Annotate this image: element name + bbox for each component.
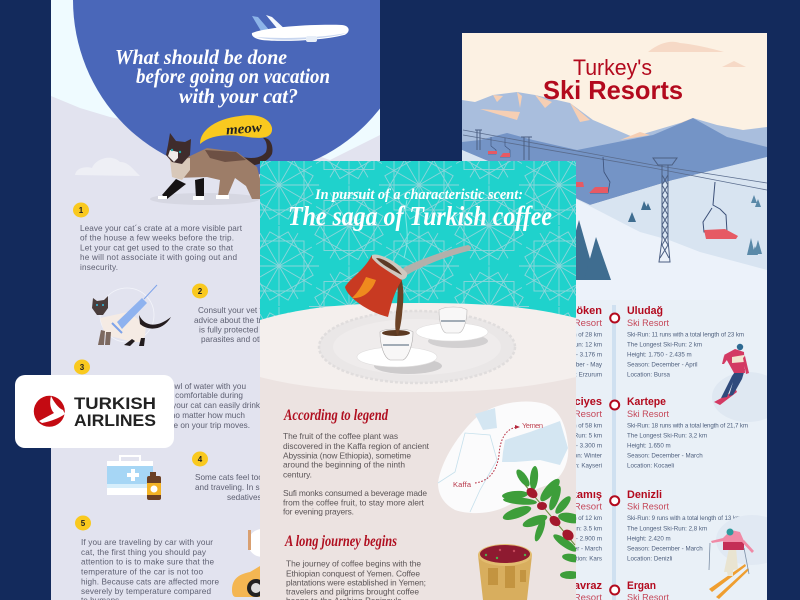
resort: Ergan: Ergan xyxy=(627,580,656,592)
step 5: severely by temperature compared xyxy=(81,587,211,596)
step 1: of the house a few weeks before the trip. xyxy=(80,234,234,242)
front mountains xyxy=(462,118,767,205)
step 2: advice about the trip xyxy=(194,316,268,325)
resort: Davraz: Davraz xyxy=(566,580,602,592)
panel: cat travel infographic xyxy=(51,0,380,600)
resort: Erciyes: Season: Winter xyxy=(560,453,602,460)
chairlift cabins xyxy=(488,137,738,239)
step 1: Let your cat get used to the crate so that xyxy=(80,244,234,252)
section: A long journey begins: travelers and pilgrims brought coffee xyxy=(286,587,419,597)
resort: Erciyes: The Longest Ski-Run: 5 km xyxy=(527,433,602,440)
title xyxy=(544,59,682,100)
resort: Erciyes: Height: 2.200 - 3.300 m xyxy=(537,443,602,450)
step 5 xyxy=(75,516,219,600)
illustration: snowboarder xyxy=(712,344,784,422)
section: According to legend xyxy=(283,407,430,517)
badge 5 xyxy=(75,516,91,530)
panel: ski resorts infographic xyxy=(462,33,788,600)
resort: Uludağ: Height: 1.750 - 2.435 m xyxy=(627,352,692,359)
step 5: high. Because cats are affected more xyxy=(81,577,219,586)
icon: copper cezve xyxy=(345,245,471,317)
section: According to legend: The fruit of the coffee plant was xyxy=(283,431,398,441)
section: According to legend: According to legend xyxy=(283,407,389,424)
step 5: attention to is to make sure that the xyxy=(81,558,214,567)
section: A long journey begins: The journey of coffee begins with the xyxy=(286,559,421,569)
doily xyxy=(319,311,515,383)
step 3: the trip, and your cat can easily drink xyxy=(127,401,261,410)
resort: Erciyes: Location: Kayseri xyxy=(555,463,602,470)
section: A long journey begins xyxy=(284,533,426,600)
icon: front coffee cup and saucer xyxy=(357,329,442,374)
logo card: Turkish Airlines xyxy=(15,375,174,448)
resort: Palandöken xyxy=(576,306,602,376)
resort: Kartepe: Ski-Run: 18 runs with a total length of 21,7 km xyxy=(627,423,748,430)
resort: Erciyes: Erciyes xyxy=(563,396,602,408)
step 4: Some cats feel too xyxy=(195,473,263,482)
resort: Kartepe: Location: Kocaeli xyxy=(627,463,674,470)
step 3 xyxy=(74,360,261,430)
clouds xyxy=(648,42,746,67)
resort: Palandöken: Palandöken xyxy=(540,305,602,317)
badge 2: 2 xyxy=(198,287,203,296)
resort: Uludağ: Ski-Run: 11 runs with a total length of 23 km xyxy=(627,332,744,338)
resort: Uludağ: Season: December - April xyxy=(627,362,698,369)
step 2: parasites and other xyxy=(201,335,271,344)
illustration: coffee branch xyxy=(501,466,583,579)
resort: Sarıkamış: Height: 2.100 - 2.900 m xyxy=(537,535,602,542)
resort: Erciyes xyxy=(576,397,602,469)
title: Ski Resorts xyxy=(543,75,683,105)
lift pylons xyxy=(475,130,677,262)
resort: Sarıkamış: Location: Kars xyxy=(562,555,602,562)
step 1 xyxy=(73,202,243,272)
resort: Ergan xyxy=(627,580,669,600)
snow slopes xyxy=(462,150,767,270)
resort: Kartepe: Season: December - March xyxy=(627,453,703,460)
panel: Turkish coffee infographic xyxy=(260,161,583,600)
step 3: the vehicle on your trip moves. xyxy=(139,421,250,430)
resort: Sarıkamış: Ski Resort xyxy=(558,502,602,513)
speech bubble: meow: meow xyxy=(225,120,263,139)
step 2: Consult your vet for xyxy=(198,306,269,315)
logo card: Turkish Airlines: AIRLINES xyxy=(74,411,156,430)
ski lift cables xyxy=(463,130,767,190)
icon: Turkish Airlines bird xyxy=(34,396,65,427)
badge 1: 1 xyxy=(79,206,84,215)
illustration: basket of coffee cherries xyxy=(478,544,532,600)
section: A long journey begins: Ethiopian conquest of Yemen. Coffee xyxy=(286,568,420,578)
title: Turkey's xyxy=(573,55,652,80)
step 3: Bring a bowl of water with you xyxy=(137,382,246,391)
resort: Kartepe xyxy=(627,396,748,470)
resort: Denizli: Denizli xyxy=(627,489,662,501)
resort: Denizli: Season: December - March xyxy=(627,545,703,552)
steam xyxy=(404,200,407,258)
coffee pour stream xyxy=(395,278,403,335)
section: According to legend: Sufi monks consumed a beverage made xyxy=(283,488,427,498)
resort: Palandöken: Ski-Run: 22 runs with a total length of 28 km xyxy=(481,332,602,338)
icon: airplane xyxy=(252,15,349,42)
resort: Kartepe: Kartepe xyxy=(627,396,666,408)
step 4 xyxy=(192,452,260,500)
table xyxy=(260,303,576,600)
resort: Denizli: Location: Denizli xyxy=(627,555,672,562)
illustration: siamese cat with syringe xyxy=(92,285,171,346)
trees xyxy=(562,195,762,280)
step 2 xyxy=(192,284,260,344)
step 3: so your cat is comfortable during xyxy=(125,391,243,400)
back mountains xyxy=(462,92,767,180)
resort: Uludağ: The Longest Ski-Run: 2 km xyxy=(627,342,702,348)
heading: In pursuit of a characteristic scent: xyxy=(314,187,523,203)
resort: Palandöken: Ski Resort xyxy=(558,318,602,329)
step 1: insecurity. xyxy=(80,263,118,272)
illustration: first aid kit xyxy=(107,456,161,500)
step 1: Leave your cat´s crate at a more visible part xyxy=(80,224,243,233)
illustration: skier xyxy=(709,515,788,599)
heading xyxy=(288,187,552,231)
resort: Uludağ: Ski Resort xyxy=(627,318,669,329)
step 4: sedatives xyxy=(227,493,262,502)
step 1: he will not associate it with going out and xyxy=(80,253,237,262)
resort: Palandöken: Height: 2.200 - 3.176 m xyxy=(537,352,602,359)
resort: Kartepe: Height: 1.650 m xyxy=(627,443,671,450)
section: According to legend: discovered in the Kaffa region of ancient xyxy=(283,441,430,451)
title xyxy=(115,45,330,108)
resort: Sarıkamış: Sarıkamış xyxy=(550,489,602,501)
resort: Kartepe: Ski Resort xyxy=(627,409,669,420)
step 5: temperature of the car is not too xyxy=(81,568,203,577)
section: According to legend: century. xyxy=(283,469,312,479)
section: According to legend: for evening prayers. xyxy=(283,507,354,517)
resort: Sarıkamış: The Longest Ski-Run: 3.5 km xyxy=(522,525,602,532)
map: Kaffa to Yemen xyxy=(438,401,568,513)
badge 1 xyxy=(73,202,89,218)
peach highlights xyxy=(480,92,695,140)
title: What should be done xyxy=(115,45,287,69)
resort: Erciyes: Ski Resort xyxy=(558,409,602,420)
timeline xyxy=(610,305,619,600)
resort: Denizli: Ski-Run: 9 runs with a total length of 13 km xyxy=(627,515,741,522)
cloud xyxy=(75,158,140,176)
resort: Uludağ: Uludağ xyxy=(627,305,663,317)
title: with your cat? xyxy=(179,84,298,108)
resort: Davraz xyxy=(576,583,602,600)
title: before going on vacation xyxy=(136,64,330,88)
resort: Sarıkamış: Ski-Run: 20 runs with a total length of 12 km xyxy=(481,515,602,522)
map: Kaffa to Yemen: Kaffa xyxy=(453,480,472,489)
illustration: walking cat xyxy=(150,133,273,205)
resort: Sarıkamış: Season: December - March xyxy=(526,545,603,552)
heading: The saga of Turkish coffee xyxy=(288,201,552,231)
section: According to legend: Abyssinia (now Ethiopia), sometime xyxy=(283,450,411,460)
resort: Palandöken: Season: November - May xyxy=(532,362,603,369)
section: A long journey begins: A long journey begins xyxy=(284,533,397,550)
icon: back coffee cup and saucer xyxy=(416,307,488,348)
resort: Denizli: The Longest Ski-Run: 2,8 km xyxy=(627,525,707,532)
resort: Palandöken: The Longest Ski-Run: 12 km xyxy=(524,342,602,348)
section: A long journey begins: plantations were established in Yemen; xyxy=(286,578,426,588)
badge 5: 5 xyxy=(81,519,86,528)
step 4: and traveling. In such xyxy=(195,483,273,492)
section: According to legend: around the beginning of the ninth xyxy=(283,460,405,470)
resort: Denizli: Ski Resort xyxy=(627,502,669,513)
section: According to legend: from the coffee fruit, to stay more alert xyxy=(283,497,425,507)
step 5: cat, the first thing you should pay xyxy=(81,548,207,557)
badge 3 xyxy=(74,360,90,374)
resort: Palandöken: Location: Erzurum xyxy=(552,372,602,379)
resort: Uludağ: Location: Bursa xyxy=(627,372,671,379)
step 2: is fully protected xyxy=(199,326,259,334)
logo card: Turkish Airlines: TURKISH xyxy=(74,394,156,413)
badge 3: 3 xyxy=(80,363,85,372)
resort: Denizli: Height: 2.420 m xyxy=(627,535,671,542)
blue title circle xyxy=(73,0,380,174)
resort: Erciyes: Ski-Run: 34 runs with a total length of 58 km xyxy=(481,423,602,430)
resort: Kartepe: The Longest Ski-Run: 3,2 km xyxy=(627,433,707,440)
badge 4: 4 xyxy=(198,455,203,464)
resort: Uludağ xyxy=(627,305,744,379)
speech bubble: meow xyxy=(200,115,272,144)
resort: Denizli xyxy=(627,489,741,562)
resort: Sarıkamış xyxy=(576,492,602,560)
step 5: If you are traveling by car with your xyxy=(81,538,213,547)
step 3: water no matter how much xyxy=(148,411,245,420)
map: Kaffa to Yemen: Yemen xyxy=(522,421,543,430)
illustration: car and thermometer xyxy=(232,529,260,597)
